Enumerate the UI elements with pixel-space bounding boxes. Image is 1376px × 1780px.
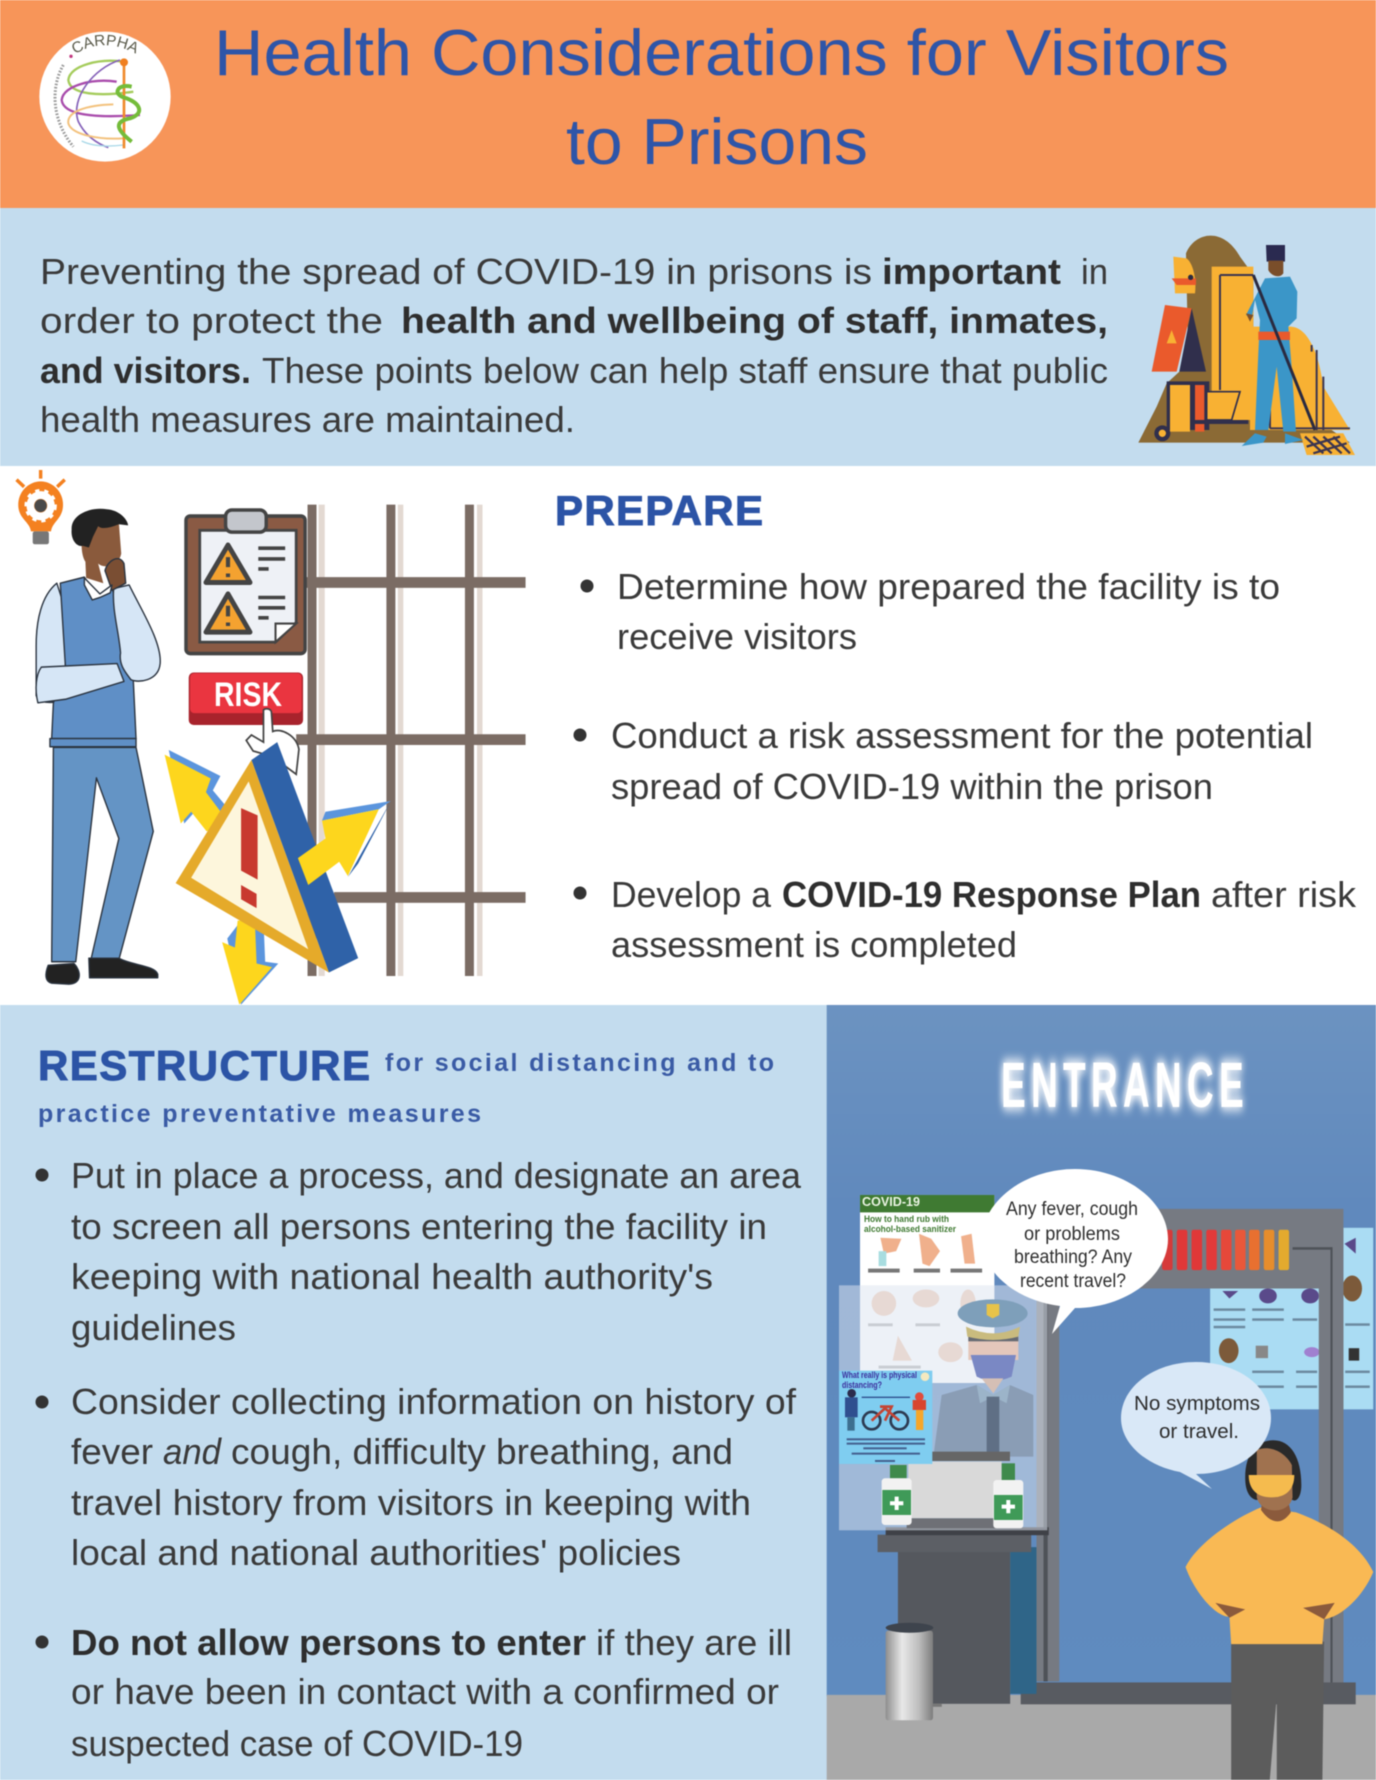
poster title text: What really is physical [842,1370,917,1380]
intro text: in [1081,251,1108,292]
speech bubble: visitor: or travel. [1159,1421,1239,1443]
bullet list: restructure: Do not allow persons to enter [71,1622,586,1663]
logo: CARPHA: CARPHA [72,34,137,54]
bullet list: prepare: Conduct a risk assessment for the potential [611,715,1313,756]
bullet list: restructure: suspected case of COVID-19 [71,1723,523,1764]
panel: prepare [0,466,1376,1005]
speech bubble: visitor: No symptoms [1134,1393,1260,1415]
bullet list: prepare: Determine how prepared the facility is to [617,566,1280,607]
officer [933,1299,1033,1457]
risk button [189,672,303,725]
bullet list: prepare: assessment is completed [611,924,1017,965]
arrows spreading up and down from warning [165,750,278,1005]
man thinking [36,509,160,984]
pointing hand [246,709,299,774]
subheading [38,1049,774,1128]
bullet list: prepare: spread of COVID-19 within the prison [611,766,1213,807]
speech bubble: officer: recent travel? [1020,1271,1126,1292]
wall and floor [827,1005,1376,1780]
poster title text: alcohol-based sanitizer [864,1224,956,1234]
bullet list: restructure: travel history from visitors in keeping with [71,1482,751,1523]
title: Health Considerations for Visitors [214,16,1229,89]
heading: prepare: PREPARE [555,487,763,534]
trash can [886,1623,942,1720]
panel: entrance scene [827,1005,1376,1780]
bullet list: restructure [36,1155,802,1764]
risk label: RISK [214,676,282,714]
bullet list: restructure: Consider collecting information on history of [71,1381,797,1422]
subheading: for social distancing and to [385,1049,774,1077]
poster: hand rub [860,1195,994,1383]
entrance scanner frame [1021,1209,1356,1704]
bullet list: restructure: or have been in contact with a confirmed or [71,1671,779,1712]
poster: what really is physical distancing [839,1371,932,1464]
intro text: order to protect the [40,300,383,341]
bullet list: restructure: Put in place a process, and designate an area [71,1155,802,1196]
bullet list: restructure: cough, difficulty breathing, and [231,1431,733,1472]
warning triangle [176,742,358,972]
entrance neon sign: ENTRANCE [1001,1051,1249,1122]
subheading: practice preventative measures [38,1100,481,1128]
screening officer behind plexiglass [839,1285,1047,1530]
illustration: man, clipboard, risk button and warning sign over prison bars [17,470,526,1005]
icon: light bulb with gear [17,470,65,544]
icon: janitor with mop and cart [1138,236,1355,455]
poster: physical distancing wall chart [1210,1228,1373,1409]
bullet list: prepare [574,566,1357,965]
visitor wearing mask [1186,1440,1373,1780]
computer [907,1452,1010,1528]
logo: CARPHA [38,30,172,162]
bullet list: prepare: Develop a [611,874,772,915]
intro text: These points below can help staff ensure that public [262,350,1108,391]
intro text: important [882,251,1061,292]
poster title text [842,1194,956,1390]
header band [0,0,1376,209]
panel: introduction [0,208,1376,466]
poster title text: COVID-19 [862,1194,920,1209]
bullet list: prepare: COVID-19 Response Plan [782,874,1201,915]
intro text: health and wellbeing of staff, inmates, [401,300,1108,341]
poster title text: distancing? [842,1380,882,1390]
intro text: Preventing the spread of COVID-19 in prisons is [40,251,872,292]
poster title text: How to hand rub with [864,1214,949,1224]
heading: restructure: RESTRUCTURE [38,1042,370,1089]
bullet list: prepare: receive visitors [617,616,857,657]
bullet list: restructure: local and national authorities' policies [71,1532,681,1573]
intro text: health measures are maintained. [40,399,575,440]
icon: clipboard with warnings [186,510,305,654]
intro text [40,251,1108,440]
bullet list: restructure: and [163,1431,222,1472]
speech bubble: officer [982,1169,1168,1334]
panel: restructure [0,1005,827,1780]
speech bubble: visitor [1121,1362,1271,1489]
bullet list: restructure: fever [71,1431,153,1472]
intro text: and visitors. [40,350,251,391]
bullet list: restructure: guidelines [71,1307,236,1348]
bullet list: prepare: after risk [1211,874,1357,915]
speech bubble: officer: or problems [1024,1224,1120,1245]
plexiglass screen [839,1285,1047,1530]
sanitizer bottles [882,1463,1023,1528]
title [214,16,1229,178]
bullet list: restructure: to screen all persons entering the facility in [71,1206,767,1247]
bullet list: restructure: keeping with national health authority's [71,1256,713,1297]
speech bubble: officer: Any fever, cough [1006,1199,1138,1220]
arrow to the right [298,801,391,885]
prison bars [296,505,526,976]
speech bubble: officer: breathing? Any [1014,1247,1132,1268]
indicator lights [1162,1230,1289,1270]
title: to Prisons [566,105,868,178]
bullet list: restructure: if they are ill [596,1622,792,1663]
desk [878,1527,1049,1704]
